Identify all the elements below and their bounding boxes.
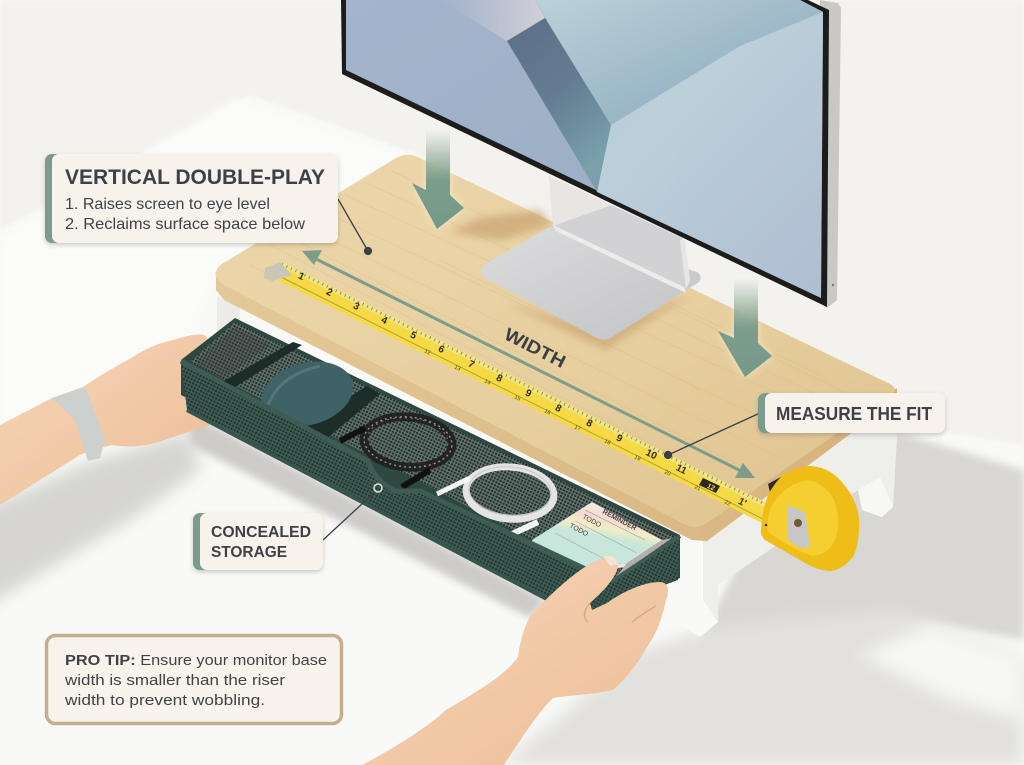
tape measure: yellow blade: 9	[614, 433, 624, 445]
tape measure: yellow blade: 2	[324, 287, 334, 299]
callout: pro tip	[46, 636, 342, 724]
tape measure: yellow blade: 21	[693, 484, 701, 493]
monitor stand	[481, 176, 701, 350]
callout: vertical double-play	[45, 154, 338, 243]
callout heading: VERTICAL DOUBLE-PLAY	[65, 166, 325, 189]
tape measure: yellow blade: 13	[453, 364, 461, 373]
notepad: REMINDER	[601, 509, 637, 532]
tape measure: yellow body	[761, 466, 859, 571]
callout: pro tip: width to prevent wobbling.	[64, 692, 265, 709]
tape measure: yellow blade: 1'	[736, 496, 748, 509]
callout: concealed storage: CONCEALED	[211, 524, 311, 541]
tape measure: yellow blade: 17	[573, 424, 581, 433]
tape measure: yellow blade: 15	[513, 394, 521, 403]
black braided cable	[340, 413, 454, 487]
tape measure: yellow blade: 6	[436, 344, 446, 356]
arrow: top downward press arrow	[412, 130, 464, 229]
label: WIDTH: WIDTH	[501, 324, 569, 372]
tape measure: yellow blade: 5	[408, 330, 418, 342]
right side wall	[605, 535, 680, 607]
tape measure: yellow blade: 16	[543, 408, 551, 417]
tape measure: yellow blade: 1	[296, 271, 306, 283]
leader: measure the fit	[664, 413, 760, 458]
notepad	[532, 502, 662, 572]
riser: white legs and side panel	[217, 296, 897, 637]
tape measure: yellow blade: 8	[494, 373, 504, 385]
arrow: right downward press arrow	[718, 278, 772, 377]
callout list: 2. Reclaims surface space below	[65, 216, 305, 233]
hand: left, holding drawer	[0, 335, 210, 505]
tape measure: yellow blade: 8	[584, 418, 594, 430]
white cable	[437, 463, 556, 535]
tape measure: yellow blade: 18	[603, 438, 611, 447]
front mesh face	[181, 360, 611, 632]
notepad: TODO	[568, 523, 590, 538]
tape measure: yellow blade: 12	[423, 348, 431, 357]
tape measure: yellow blade: 20	[663, 469, 671, 478]
callout list	[65, 196, 305, 233]
tape measure: yellow blade	[264, 262, 765, 523]
tape measure: yellow blade: 11	[674, 462, 689, 477]
drawer: mesh tray	[181, 318, 680, 632]
notepad: TODO	[581, 514, 603, 529]
tape measure: yellow blade: 19	[633, 454, 641, 463]
arrow: width dimension	[302, 250, 755, 478]
tape measure: yellow blade: 8	[553, 403, 563, 415]
tape measure: yellow blade: 12	[706, 483, 716, 493]
mouse	[254, 352, 380, 440]
riser: bamboo top board	[215, 155, 897, 541]
callout: concealed storage	[193, 513, 323, 570]
tape measure: yellow blade: 7	[466, 359, 476, 371]
monitor	[341, 0, 841, 308]
hand: right, with arm	[362, 556, 668, 765]
shadow of monitor on board	[450, 210, 552, 240]
tape measure: yellow blade: 3	[351, 301, 361, 313]
callout: pro tip: PRO TIP: Ensure your monitor base	[65, 652, 327, 669]
tape measure: yellow blade: 14	[483, 378, 491, 387]
callout: pro tip: width is smaller than the riser	[64, 672, 285, 689]
tape measure: yellow blade: 9	[523, 388, 533, 400]
tape measure: yellow blade: 4	[379, 315, 389, 327]
callout list: 1. Raises screen to eye level	[65, 196, 270, 213]
leader: concealed storage	[323, 484, 382, 540]
callout: measure the fit: MEASURE THE FIT	[776, 404, 932, 424]
watch band	[52, 387, 105, 461]
leader: vertical double-play	[338, 199, 372, 254]
callout: measure the fit	[758, 393, 945, 433]
callout: concealed storage: STORAGE	[211, 544, 287, 561]
tape measure: yellow blade: 10	[644, 447, 659, 462]
tape measure: yellow blade: 22	[723, 499, 731, 508]
